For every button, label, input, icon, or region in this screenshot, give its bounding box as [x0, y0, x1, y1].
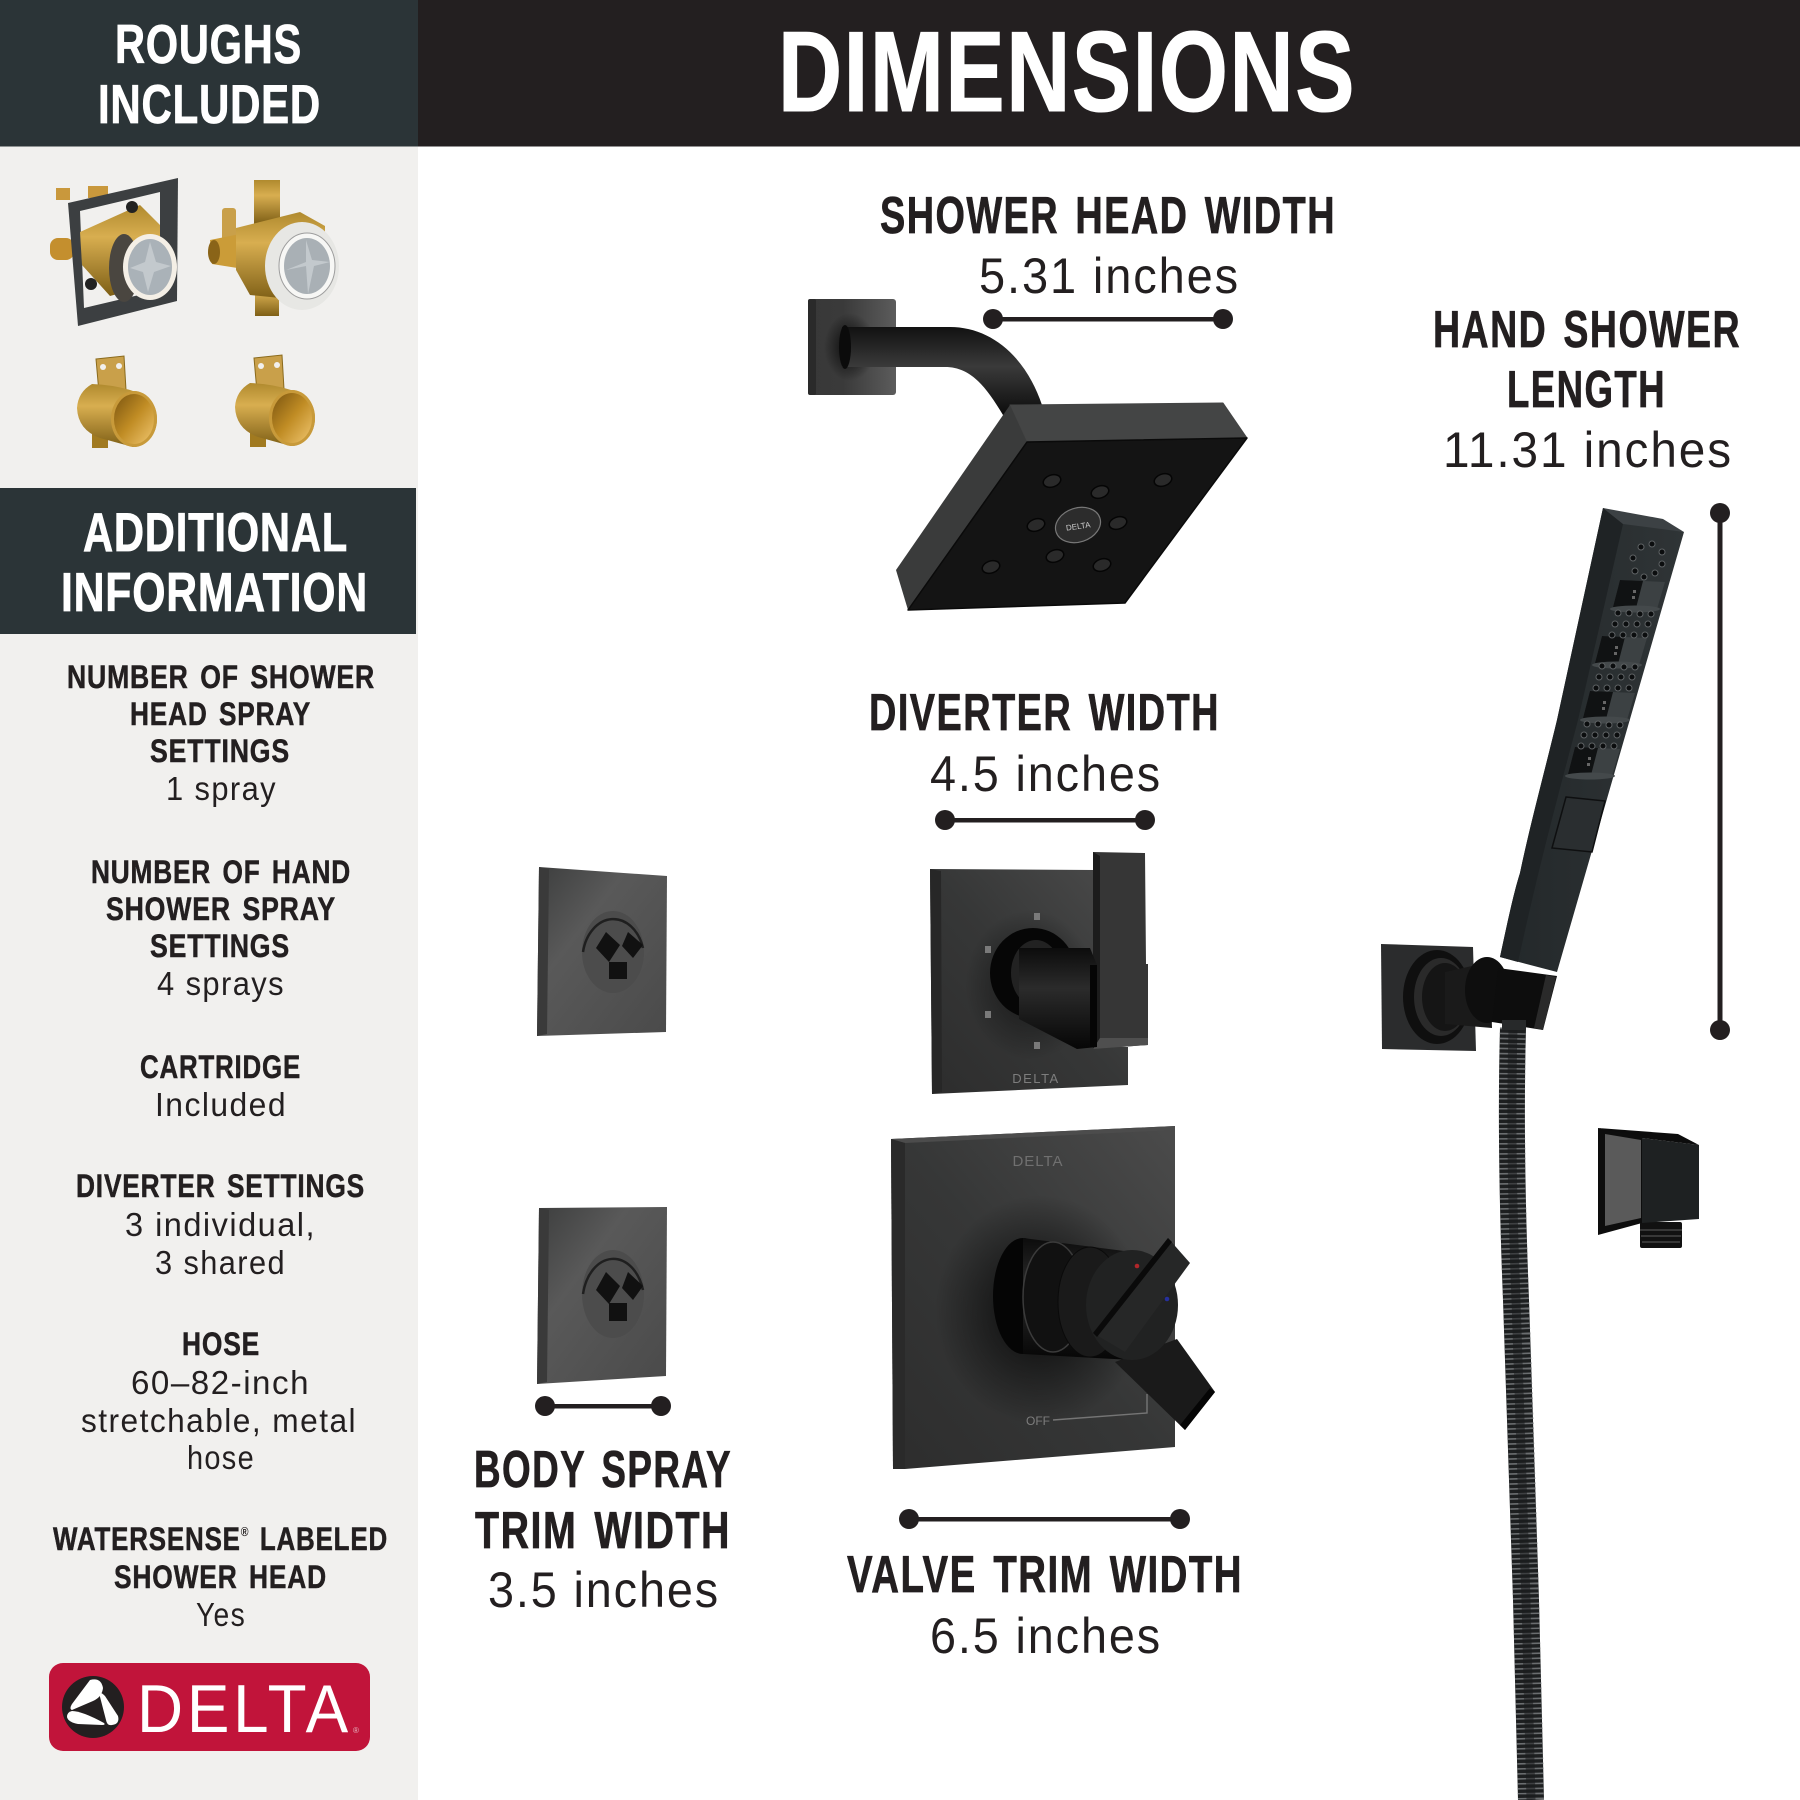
dimension line: valve trim [899, 1509, 1190, 1529]
header: roughs included [0, 0, 418, 146]
heading line: INFORMATION [61, 561, 368, 623]
plate [891, 1126, 1175, 1469]
cylinder [993, 1238, 1053, 1354]
spray dial [582, 911, 644, 993]
center badge [1051, 502, 1105, 548]
icon: wall outlet [1598, 1128, 1699, 1248]
logo wordmark: DELTA [137, 1671, 352, 1747]
upper lever [1093, 1238, 1190, 1352]
spray marks [596, 1272, 643, 1321]
right block [1093, 852, 1148, 1049]
dimension line: shower head [983, 309, 1233, 329]
text block: hose: hose [187, 1439, 255, 1476]
text block: hand shower spray settings: 4 sprays [157, 965, 285, 1002]
dimension line: body spray [535, 1396, 671, 1416]
head left face [896, 405, 1027, 610]
plate [930, 869, 1128, 1094]
title: DIMENSIONS [778, 9, 1356, 136]
label: body spray trim width: TRIM WIDTH [475, 1502, 731, 1560]
text block: diverter settings: 3 individual, [125, 1206, 316, 1243]
handle top bevel [1603, 508, 1684, 532]
nozzle grids [1609, 610, 1654, 638]
text block: hose: HOSE [182, 1326, 260, 1362]
label: body spray trim width: 3.5 inches [488, 1562, 720, 1618]
spray ring [1630, 541, 1665, 580]
logo: delta [49, 1663, 370, 1751]
text block: cartridge: CARTRIDGE [140, 1049, 301, 1085]
text block: watersense: WATERSENSE [53, 1521, 285, 1557]
text block: head spray settings: SETTINGS [150, 733, 290, 769]
label: body spray trim width: BODY SPRAY [474, 1441, 732, 1499]
wall bracket flange [1381, 944, 1476, 1051]
header: additional information [0, 488, 416, 634]
label: valve trim width: 6.5 inches [930, 1608, 1162, 1664]
label: diverter width: 4.5 inches [930, 746, 1162, 802]
text block: hose [81, 1326, 357, 1476]
text block: hand shower spray settings: SETTINGS [150, 928, 290, 964]
spray marks [596, 932, 643, 979]
text block: head spray settings: NUMBER OF SHOWER [67, 659, 375, 695]
plate brand: DELTA [1012, 1153, 1064, 1170]
mode markers [985, 913, 1040, 1049]
head front face [908, 438, 1247, 610]
text block: head spray settings: HEAD SPRAY [130, 696, 311, 732]
icon: rough valve body [208, 180, 339, 316]
text block: diverter settings: 3 shared [155, 1244, 286, 1281]
handle [1500, 508, 1684, 972]
label: valve trim width: VALVE TRIM WIDTH [847, 1546, 1243, 1604]
lever [1019, 948, 1097, 1049]
button panel [1552, 797, 1605, 852]
icon: brass body spray rough [235, 355, 315, 447]
label: body spray trim width [474, 1441, 732, 1618]
label: shower head width: SHOWER HEAD WIDTH [880, 187, 1336, 245]
valve trim illustration [891, 1126, 1215, 1469]
wall flange [808, 299, 896, 395]
header: dimensions [418, 0, 1800, 146]
text block: hose: 60–82-inch [131, 1364, 310, 1401]
dimension line: diverter [935, 810, 1155, 830]
label: hand shower length: 11.31 inches [1443, 422, 1733, 478]
label: valve trim width [847, 1546, 1243, 1664]
label: shower head width [880, 187, 1336, 304]
label: diverter width: DIVERTER WIDTH [869, 684, 1220, 742]
heading line: ROUGHS [115, 13, 302, 75]
text block: watersense [53, 1521, 388, 1633]
logo: delta: ® [353, 1726, 359, 1735]
text block: cartridge [140, 1049, 301, 1123]
text block: watersense: ® [241, 1524, 249, 1539]
text block: watersense: LABELED [249, 1521, 388, 1557]
text block: watersense: SHOWER HEAD [114, 1559, 327, 1595]
heading line: ADDITIONAL [83, 501, 348, 563]
text block: hand shower spray settings: SHOWER SPRAY [106, 891, 336, 927]
icon: brass body spray rough [77, 356, 157, 448]
shower head illustration [808, 299, 1247, 610]
icon: rough valve in square frame [50, 178, 178, 326]
holder clip [1492, 968, 1557, 1030]
center badge: DELTA [1065, 520, 1092, 533]
knob ring [990, 928, 1076, 1018]
temperature dots [1135, 1264, 1139, 1268]
text block: hand shower spray settings: NUMBER OF HAND [91, 854, 351, 890]
lower lever [1115, 1339, 1215, 1430]
label: hand shower length: LENGTH [1507, 361, 1666, 419]
body spray trim: upper [537, 867, 667, 1036]
spray slots [1610, 580, 1665, 612]
label: shower head width: 5.31 inches [979, 248, 1240, 304]
icon: delta triangle mark [62, 1676, 124, 1738]
text block: hand shower spray settings [91, 854, 351, 1002]
text block: diverter settings [76, 1168, 365, 1281]
text block: head spray settings [67, 659, 375, 807]
text block: head spray settings: 1 spray [166, 770, 277, 807]
text block: watersense: Yes [196, 1596, 246, 1633]
spray dial [582, 1250, 644, 1338]
heading line: INCLUDED [98, 73, 321, 135]
dimension line: hand shower [1710, 503, 1730, 1040]
body spray trim: lower [537, 1207, 667, 1384]
nozzles [981, 472, 1173, 575]
text block: hose: stretchable, metal [81, 1402, 357, 1439]
head top face [1010, 403, 1247, 442]
panel: sidebar [0, 146, 418, 1800]
knob cap [1086, 1250, 1178, 1360]
arm [842, 327, 1042, 415]
text block: cartridge: Included [155, 1086, 287, 1123]
hose [1512, 1028, 1531, 1800]
text block: diverter settings: DIVERTER SETTINGS [76, 1168, 365, 1204]
plate brand: DELTA [1012, 1071, 1060, 1086]
label: diverter width [869, 684, 1220, 802]
label: hand shower length [1433, 301, 1741, 478]
off label: OFF [1026, 1414, 1050, 1428]
diverter trim illustration [930, 852, 1148, 1094]
hand shower illustration [1381, 508, 1684, 1051]
